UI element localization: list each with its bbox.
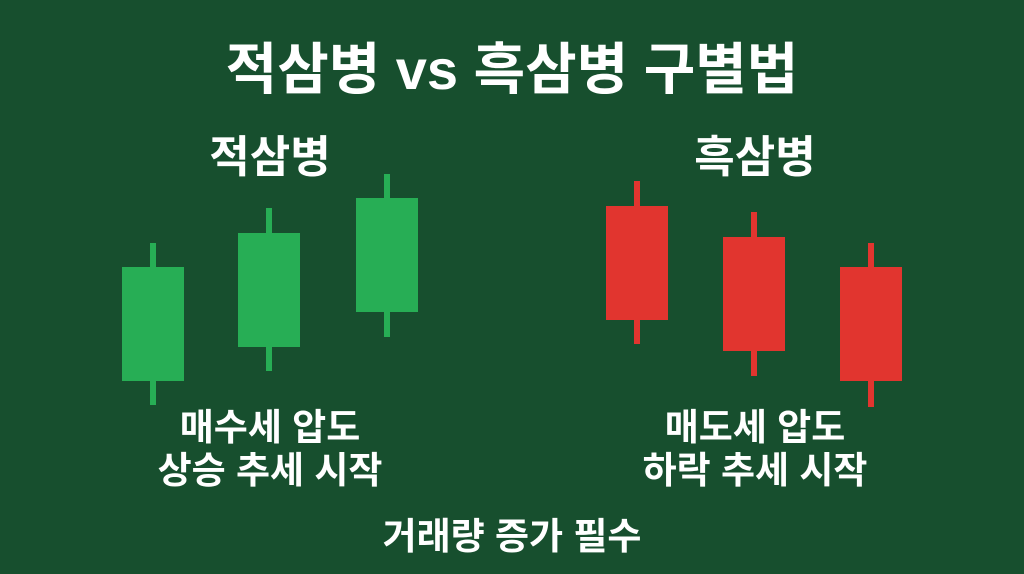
chart: green candles: [122, 174, 418, 405]
candle 1: [122, 243, 184, 405]
text: bullish description: 상승 추세 시작: [158, 450, 382, 491]
text: bullish description: 매수세 압도: [180, 407, 360, 448]
candle 2: [238, 208, 300, 371]
text: bearish description: 매도세 압도: [665, 407, 845, 448]
candle 3: [840, 243, 902, 407]
candle 2: [723, 212, 785, 376]
footer note: 거래량 증가 필수: [383, 516, 641, 557]
chart: red candles: [606, 181, 902, 407]
text: bullish description: [158, 407, 382, 491]
candle 1: [606, 181, 668, 344]
text: bearish description: [643, 407, 867, 491]
title: 적삼병 vs 흑삼병 구별법: [226, 38, 798, 101]
heading: 흑삼병: 흑삼병: [694, 133, 816, 182]
candle 3: [356, 174, 418, 337]
text: bearish description: 하락 추세 시작: [643, 450, 867, 491]
heading: 적삼병: 적삼병: [209, 133, 331, 182]
